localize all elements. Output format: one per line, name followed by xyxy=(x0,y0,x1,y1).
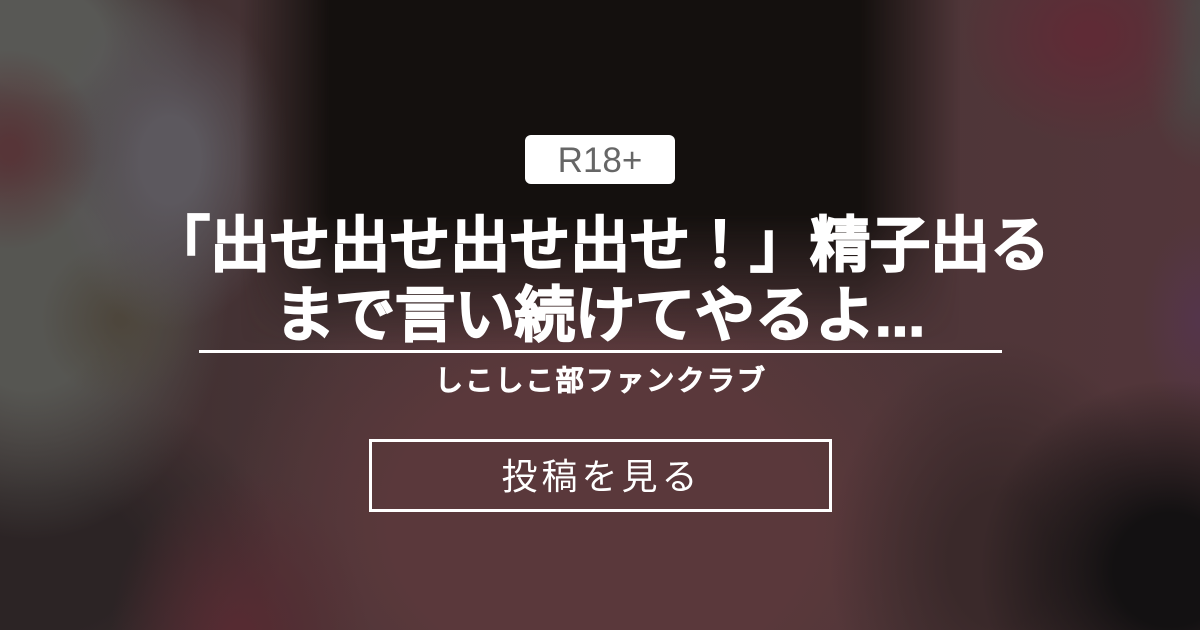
button: view post: 投稿を見る xyxy=(501,456,702,497)
title xyxy=(150,212,1050,349)
button: view post xyxy=(369,439,832,512)
title: まで言い続けてやるよ... xyxy=(275,282,925,349)
badge: R18+ xyxy=(525,135,675,184)
dark centre of background xyxy=(240,0,960,345)
fan club name: しこしこ部ファンクラブ xyxy=(435,365,767,396)
title underline xyxy=(199,350,1002,353)
title: 「出せ出せ出せ出せ！」精子出る xyxy=(150,212,1050,279)
badge: R18+: R18+ xyxy=(558,141,642,180)
